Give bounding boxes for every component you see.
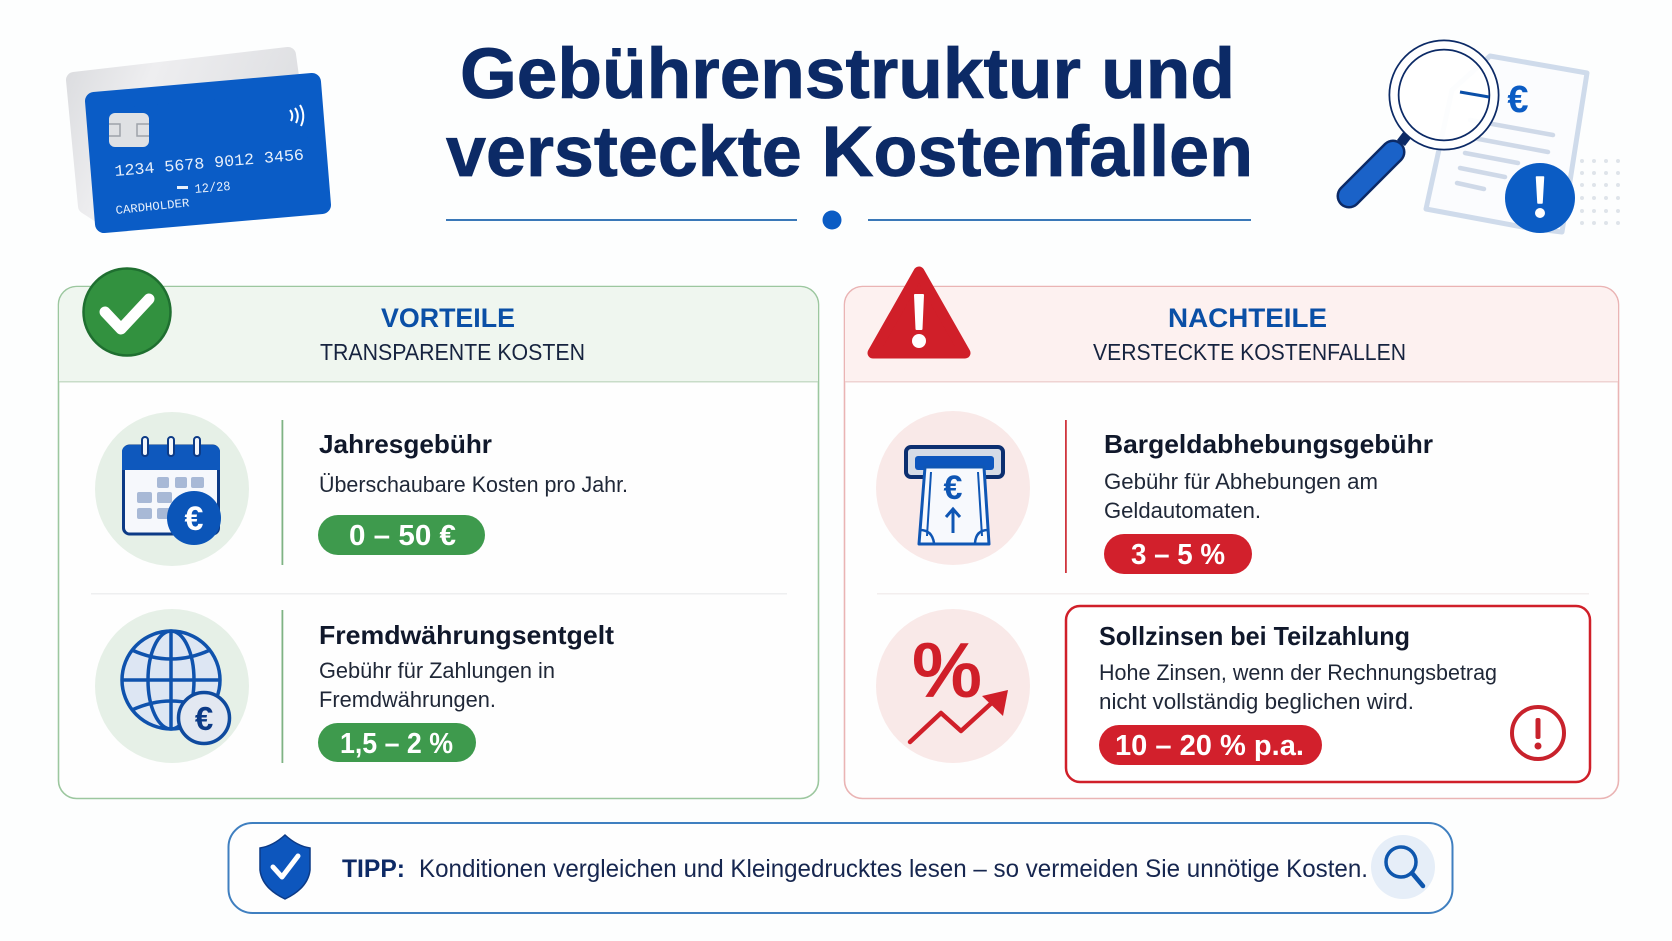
value pill bbox=[1104, 534, 1252, 574]
alert badge bbox=[1505, 163, 1575, 233]
icon: search bbox=[1371, 835, 1435, 899]
icon: credit cards bbox=[74, 55, 322, 224]
invoice sheet bbox=[1426, 56, 1587, 232]
subheading: TRANSPARENTE KOSTEN bbox=[320, 339, 585, 365]
title bbox=[446, 35, 1253, 192]
heading: Jahresgebühr bbox=[319, 429, 492, 459]
heading: Sollzinsen bei Teilzahlung bbox=[1099, 621, 1410, 651]
heading Nachteile: NACHTEILE bbox=[1168, 303, 1327, 333]
heading: Fremdwährungsentgelt bbox=[319, 620, 614, 650]
description bbox=[319, 658, 555, 712]
description: Gebühr für Abhebungen am bbox=[1104, 469, 1378, 494]
value pill bbox=[318, 723, 476, 762]
contactless symbol bbox=[290, 105, 303, 126]
invoice lines bbox=[1457, 120, 1553, 189]
heading: Bargeldabhebungsgebühr bbox=[1104, 429, 1433, 459]
icon: percent with rising arrow: % bbox=[912, 626, 982, 714]
title: Gebührenstruktur und bbox=[460, 35, 1235, 114]
value pill: 10 – 20 % p.a. bbox=[1115, 730, 1304, 762]
row: Bargeldabhebungsgebühr bbox=[876, 411, 1433, 574]
heading Vorteile: VORTEILE bbox=[381, 303, 515, 333]
row rule bbox=[1065, 420, 1067, 573]
icon: warning triangle bbox=[873, 272, 965, 353]
icon: globe with euro: € bbox=[195, 700, 213, 737]
icon: alert circle bbox=[1512, 707, 1564, 759]
row: Fremdwährungsentgelt bbox=[95, 609, 614, 763]
icon: calendar with euro: € bbox=[185, 500, 204, 538]
value pill bbox=[318, 515, 485, 555]
card holder: CARDHOLDER bbox=[115, 196, 190, 218]
value pill: 1,5 – 2 % bbox=[340, 728, 453, 760]
panel frame bbox=[58, 286, 818, 798]
description bbox=[1104, 469, 1378, 523]
row: Sollzinsen bbox=[876, 606, 1590, 782]
tip box bbox=[228, 823, 1452, 913]
card dash bbox=[177, 186, 188, 189]
panel frame bbox=[844, 286, 1618, 798]
row rule bbox=[282, 420, 283, 565]
dot pattern bbox=[1580, 159, 1620, 225]
icon: green check bbox=[84, 268, 170, 356]
description: Geldautomaten. bbox=[1104, 498, 1261, 523]
card chip bbox=[109, 113, 149, 147]
icon: magnifier over invoice with alert bbox=[1349, 45, 1620, 233]
description bbox=[1099, 660, 1497, 714]
title divider bbox=[446, 210, 1251, 230]
tip text: Konditionen vergleichen und Kleingedrucktes lesen – so vermeiden Sie unnötige Kosten. bbox=[419, 855, 1368, 883]
card number: 1234 5678 9012 3456 bbox=[114, 146, 305, 181]
panel: Vorteile bbox=[58, 268, 818, 798]
description: Hohe Zinsen, wenn der Rechnungsbetrag bbox=[1099, 660, 1497, 685]
icon: calendar with euro bbox=[95, 412, 249, 566]
row rule bbox=[282, 610, 283, 763]
magnifier handle bbox=[1401, 130, 1411, 143]
highlighted box bbox=[1066, 606, 1590, 782]
euro symbol: € bbox=[1507, 79, 1529, 121]
icon: ATM banknote: € bbox=[944, 469, 963, 507]
description: Gebühr für Zahlungen in bbox=[319, 658, 555, 683]
value pill: 3 – 5 % bbox=[1131, 539, 1225, 571]
icon: percent with rising arrow bbox=[876, 609, 1030, 763]
row: Jahresgebühr bbox=[95, 412, 628, 566]
value pill bbox=[1099, 725, 1322, 765]
card expiry: 12/28 bbox=[194, 179, 231, 197]
subheading: VERSTECKTE KOSTENFALLEN bbox=[1093, 339, 1406, 365]
silver back card bbox=[74, 55, 297, 215]
value pill: 0 – 50 € bbox=[349, 520, 456, 552]
panel header bbox=[59, 287, 818, 382]
magnifier lens bbox=[1394, 45, 1494, 145]
description: Fremdwährungen. bbox=[319, 687, 496, 712]
icon: ATM banknote bbox=[876, 411, 1030, 565]
panel header bbox=[845, 287, 1618, 382]
description: Überschaubare Kosten pro Jahr. bbox=[319, 472, 628, 497]
row divider bbox=[877, 593, 1589, 594]
row divider bbox=[91, 593, 787, 594]
tip label: TIPP: bbox=[342, 855, 405, 883]
blue front card bbox=[94, 82, 322, 224]
title: versteckte Kostenfallen bbox=[446, 113, 1253, 192]
description: nicht vollständig beglichen wird. bbox=[1099, 689, 1414, 714]
panel: Nachteile bbox=[844, 272, 1618, 798]
icon: globe with euro bbox=[95, 609, 249, 763]
icon: shield bbox=[260, 835, 310, 899]
